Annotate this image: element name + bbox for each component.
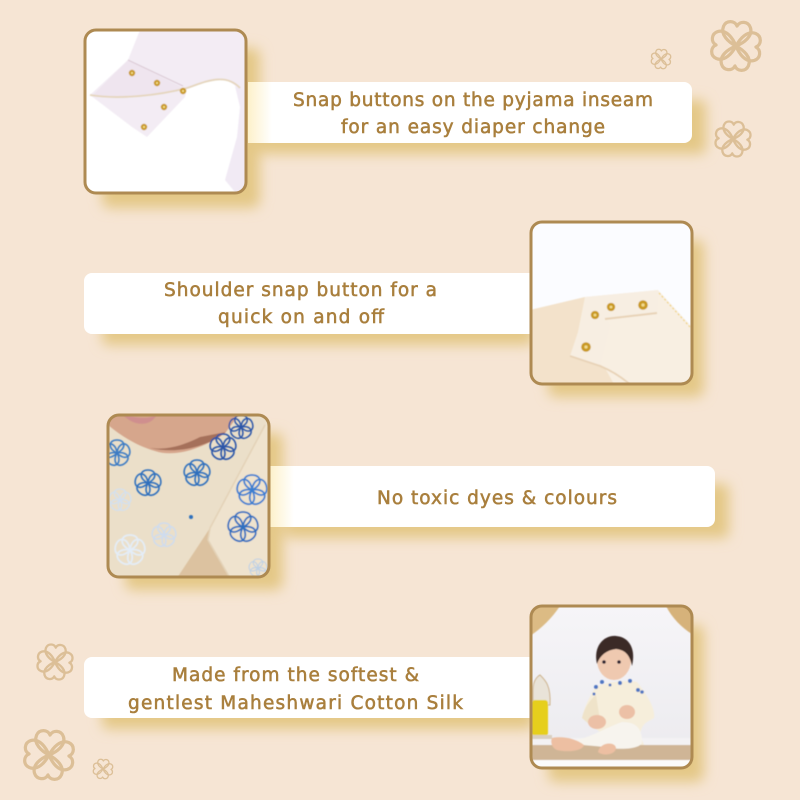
panel: softest cotton silk: [84, 606, 704, 782]
panel: no toxic dyes: [103, 413, 729, 590]
photo: pyjama inseam with snaps: [85, 30, 247, 193]
text bar: shoulder snap: [84, 273, 531, 334]
photo: seated baby: [530, 606, 693, 770]
panel: shoulder snap button: [84, 222, 704, 397]
panel: pyjama snap buttons: [85, 30, 706, 208]
photo: shoulder placket with snaps: [530, 222, 692, 386]
shadow: panel one: [102, 48, 706, 208]
icon: clover top right small: [651, 49, 671, 69]
icon: clover top right large: [711, 21, 761, 71]
text bar: pyjama inseam: Snap buttons on the pyjama inseam: [293, 90, 653, 111]
text bar: no toxic dyes: No toxic dyes & colours: [377, 488, 617, 509]
text bar: shoulder snap: Shoulder snap button for a: [164, 280, 437, 301]
photo: embroidered collar: [103, 413, 270, 578]
text bar: softest cotton silk: Made from the softest &: [172, 665, 419, 686]
text bar: shoulder snap: quick on and off: [218, 307, 385, 328]
shadow: panel four: [102, 625, 704, 782]
text bar: softest cotton silk: gentlest Maheshwari Cotton Silk: [128, 693, 463, 714]
shadow: panel three: [125, 433, 729, 590]
shadow: panel two: [102, 240, 704, 397]
text bar: no toxic dyes: [270, 466, 715, 527]
icon: clover right medium: [715, 121, 751, 157]
icon: clover bottom left small: [93, 759, 113, 779]
icon: clover bottom left large: [24, 730, 74, 780]
text bar: pyjama inseam: for an easy diaper change: [341, 117, 605, 138]
icon: clover bottom left medium: [37, 644, 73, 680]
text bar: softest cotton silk: [84, 657, 531, 718]
text bar: pyjama inseam: [248, 82, 692, 143]
